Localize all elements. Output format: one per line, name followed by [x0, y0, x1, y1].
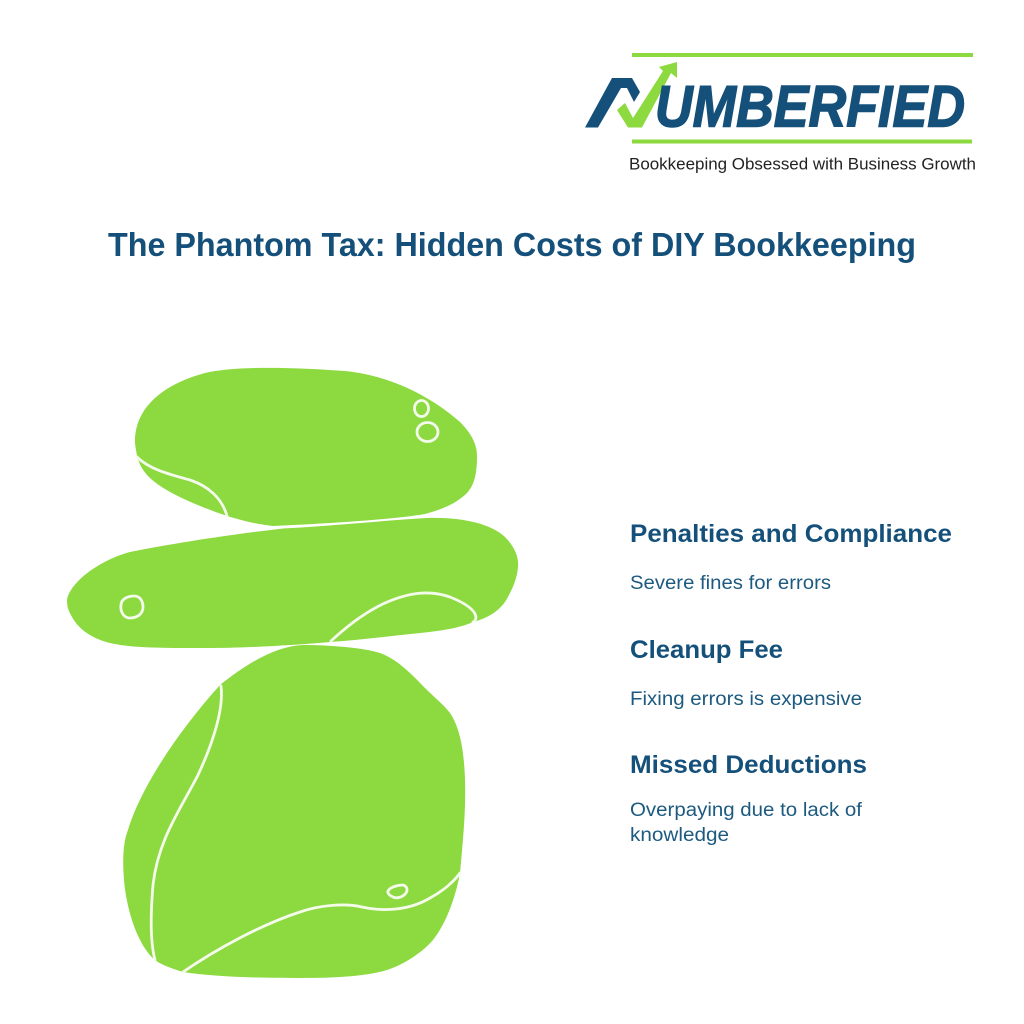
- item: missed deductions: [630, 751, 867, 846]
- stone: middle: [67, 518, 518, 648]
- heading: Missed Deductions: [630, 751, 867, 779]
- logo wordmark: UMBERFIED: [655, 74, 965, 140]
- description: Overpaying due to lack of: [630, 800, 863, 821]
- logo tagline: Bookkeeping Obsessed with Business Growth: [629, 156, 976, 174]
- heading: Cleanup Fee: [630, 636, 783, 664]
- stone: bottom: [123, 645, 465, 978]
- description: Severe fines for errors: [630, 573, 831, 594]
- heading: Penalties and Compliance: [630, 520, 952, 548]
- icon: logo green check arrow: [617, 62, 677, 128]
- title: The Phantom Tax: Hidden Costs of DIY Bookkeeping: [108, 226, 916, 263]
- description: Fixing errors is expensive: [630, 689, 862, 710]
- stone: top: [135, 368, 477, 526]
- item: penalties and compliance: [630, 520, 952, 594]
- description: knowledge: [630, 825, 729, 846]
- icon: logo N mark blue: [585, 78, 640, 128]
- item: cleanup fee: [630, 636, 862, 710]
- illustration: stacked stones: [67, 368, 518, 978]
- logo: [585, 53, 976, 174]
- description: [630, 800, 863, 846]
